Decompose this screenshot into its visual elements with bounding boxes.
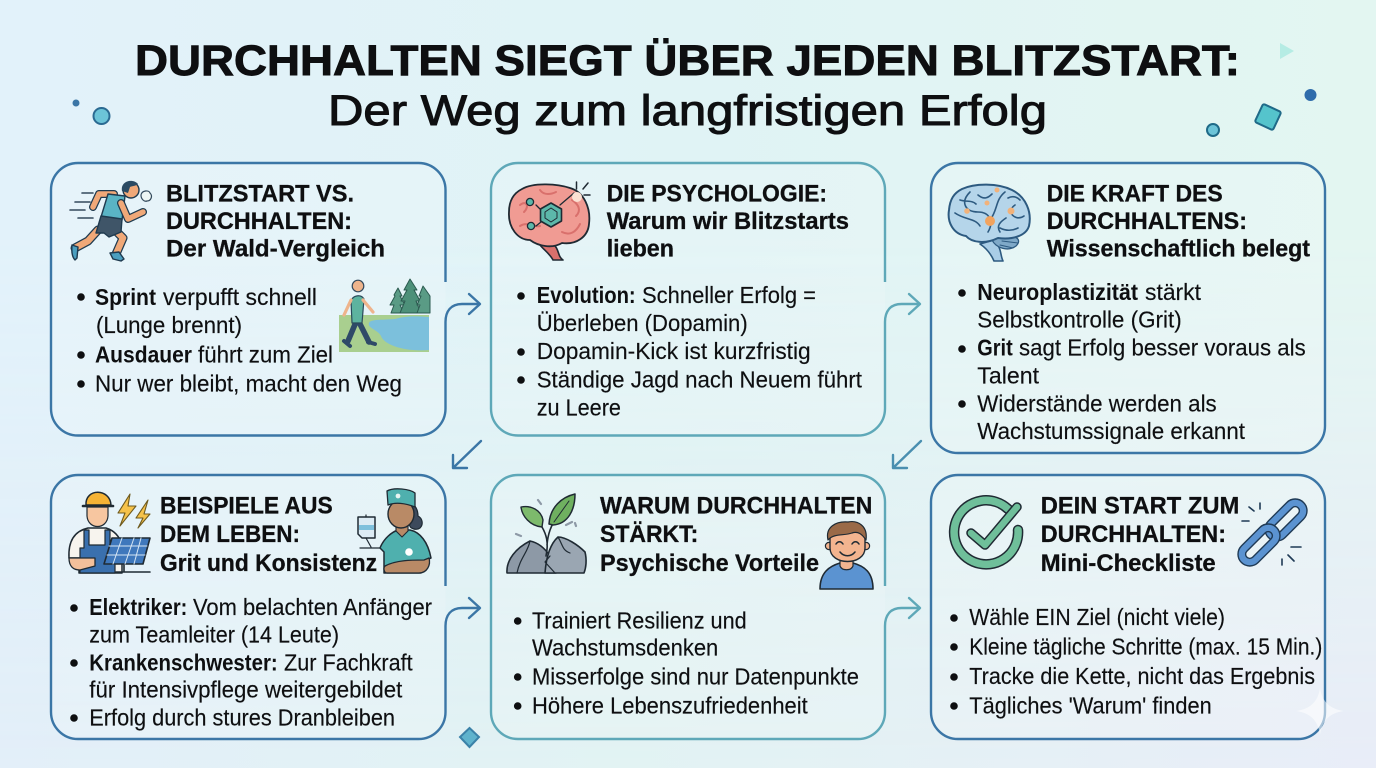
title: Der Weg zum langfristigen Erfolg xyxy=(328,87,1047,135)
bullet list xyxy=(77,284,402,397)
bullet list: Kleine tägliche Schritte (max. 15 Min.) xyxy=(969,633,1322,659)
bullet list: Misserfolge sind nur Datenpunkte xyxy=(532,663,859,689)
heading: Wissenschaftlich belegt xyxy=(1047,236,1310,263)
heading: DURCHHALTEN: xyxy=(1041,521,1226,548)
heading: lieben xyxy=(607,236,674,263)
bullet list: Grit xyxy=(977,335,1013,361)
heading: Grit und Konsistenz xyxy=(160,550,377,577)
arrow: panel 4 to panel 5 xyxy=(469,598,480,618)
bullet list: Wachstumssignale erkannt xyxy=(977,418,1246,444)
heading: WARUM DURCHHALTEN xyxy=(600,492,872,519)
heading xyxy=(607,181,849,263)
heading: STÄRKT: xyxy=(600,521,698,548)
bullet list: verpufft schnell xyxy=(163,284,317,310)
icon: green check mark in circle xyxy=(954,500,1018,564)
icon: walker by the lake in the forest xyxy=(339,279,430,352)
panel: Warum Durchhalten stärkt xyxy=(491,475,920,739)
panel: Beispiele aus dem Leben xyxy=(51,475,480,739)
bullet list xyxy=(514,607,859,718)
icon: chain links xyxy=(1238,499,1307,566)
icon: smiling person xyxy=(820,522,873,589)
bullet list: Tägliches 'Warum' finden xyxy=(969,692,1212,718)
heading: DURCHHALTEN: xyxy=(166,208,352,235)
bullet list: Höhere Lebenszufriedenheit xyxy=(532,692,808,718)
heading: Psychische Vorteile xyxy=(600,550,819,577)
bullet list: zu Leere xyxy=(537,395,621,421)
icon: sparkle watermark xyxy=(1296,688,1344,735)
bullet list: Erfolg durch stures Dranbleiben xyxy=(89,704,395,730)
icon: sprout breaking through rocks xyxy=(507,494,586,573)
heading xyxy=(160,492,377,577)
bullet list: Wachstumsdenken xyxy=(532,635,718,661)
bullet list: führt zum Ziel xyxy=(198,342,333,368)
bullet list xyxy=(950,604,1322,718)
bullet list: Wähle EIN Ziel (nicht viele) xyxy=(969,604,1225,630)
bullet list: (Lunge brennt) xyxy=(96,312,242,338)
bullet list: Elektriker: xyxy=(89,594,187,620)
panel: Dein Start zum Durchhalten xyxy=(931,475,1325,739)
heading: Warum wir Blitzstarts xyxy=(607,208,849,235)
bullet list: Krankenschwester: xyxy=(89,649,278,675)
icon: electrician with solar panel xyxy=(69,492,150,573)
bullet list xyxy=(517,282,863,421)
arrow: panel 2 to panel 3 xyxy=(909,294,920,314)
bullet list: Talent xyxy=(977,362,1040,388)
heading: BEISPIELE AUS xyxy=(160,492,333,519)
bullet list: Zur Fachkraft xyxy=(284,649,413,675)
heading: BLITZSTART VS. xyxy=(166,180,354,208)
bullet list: stärkt xyxy=(1145,279,1202,305)
heading: Der Wald-Vergleich xyxy=(166,236,385,263)
heading xyxy=(600,492,872,577)
title: DURCHHALTEN SIEGT ÜBER JEDEN BLITZSTART: xyxy=(135,37,1240,85)
heading: DIE KRAFT DES xyxy=(1047,181,1223,208)
bullet list: Ständige Jagd nach Neuem führt xyxy=(537,367,863,393)
bullet list: Schneller Erfolg = xyxy=(642,282,816,308)
bullet list: Dopamin-Kick ist kurzfristig xyxy=(537,338,811,364)
bullet list: sagt Erfolg besser voraus als xyxy=(1019,335,1306,361)
icon: blue brain with neural pathways xyxy=(949,185,1030,261)
panel: Blitzstart vs. Durchhalten xyxy=(51,163,480,436)
arrow: panel 2 down to panel 4 xyxy=(453,441,481,468)
bullet list: Vom belachten Anfänger xyxy=(193,594,432,620)
bullet list: zum Teamleiter (14 Leute) xyxy=(89,621,339,647)
heading: Mini-Checkliste xyxy=(1041,550,1216,577)
arrow: panel 3 down to panel 5 xyxy=(893,441,921,468)
icon: nurse with IV drip xyxy=(358,489,431,573)
bullet list xyxy=(958,279,1306,444)
bullet list: Neuroplastizität xyxy=(977,279,1138,305)
panel: Die Psychologie xyxy=(491,163,920,436)
bullet list: Selbstkontrolle (Grit) xyxy=(977,307,1182,333)
icon: pink brain with dopamine molecule xyxy=(509,182,590,260)
bullet list: Sprint xyxy=(95,284,156,310)
arrow: panel 5 to panel 6 xyxy=(909,598,920,618)
heading: DEIN START ZUM xyxy=(1041,492,1239,519)
heading: DIE PSYCHOLOGIE: xyxy=(607,181,827,208)
bullet list: Nur wer bleibt, macht den Weg xyxy=(95,371,402,397)
bullet list xyxy=(70,594,432,730)
arrow: panel 1 to panel 2 xyxy=(469,294,480,314)
bullet list: Widerstände werden als xyxy=(977,391,1217,417)
heading xyxy=(1047,181,1310,263)
bullet list: Tracke die Kette, nicht das Ergebnis xyxy=(969,663,1315,689)
title xyxy=(135,37,1240,135)
icon: runner xyxy=(70,181,151,261)
bullet list: Ausdauer xyxy=(95,342,192,368)
bullet list: für Intensivpflege weitergebildet xyxy=(89,676,403,702)
bullet list: Überleben (Dopamin) xyxy=(537,310,748,336)
bullet list: Trainiert Resilienz und xyxy=(532,607,747,633)
heading xyxy=(1041,492,1239,577)
bullet list: Evolution: xyxy=(537,282,636,308)
heading xyxy=(166,180,385,263)
heading: DURCHHALTENS: xyxy=(1047,208,1247,235)
heading: DEM LEBEN: xyxy=(160,521,300,548)
panel: Die Kraft des Durchhaltens xyxy=(931,163,1325,453)
